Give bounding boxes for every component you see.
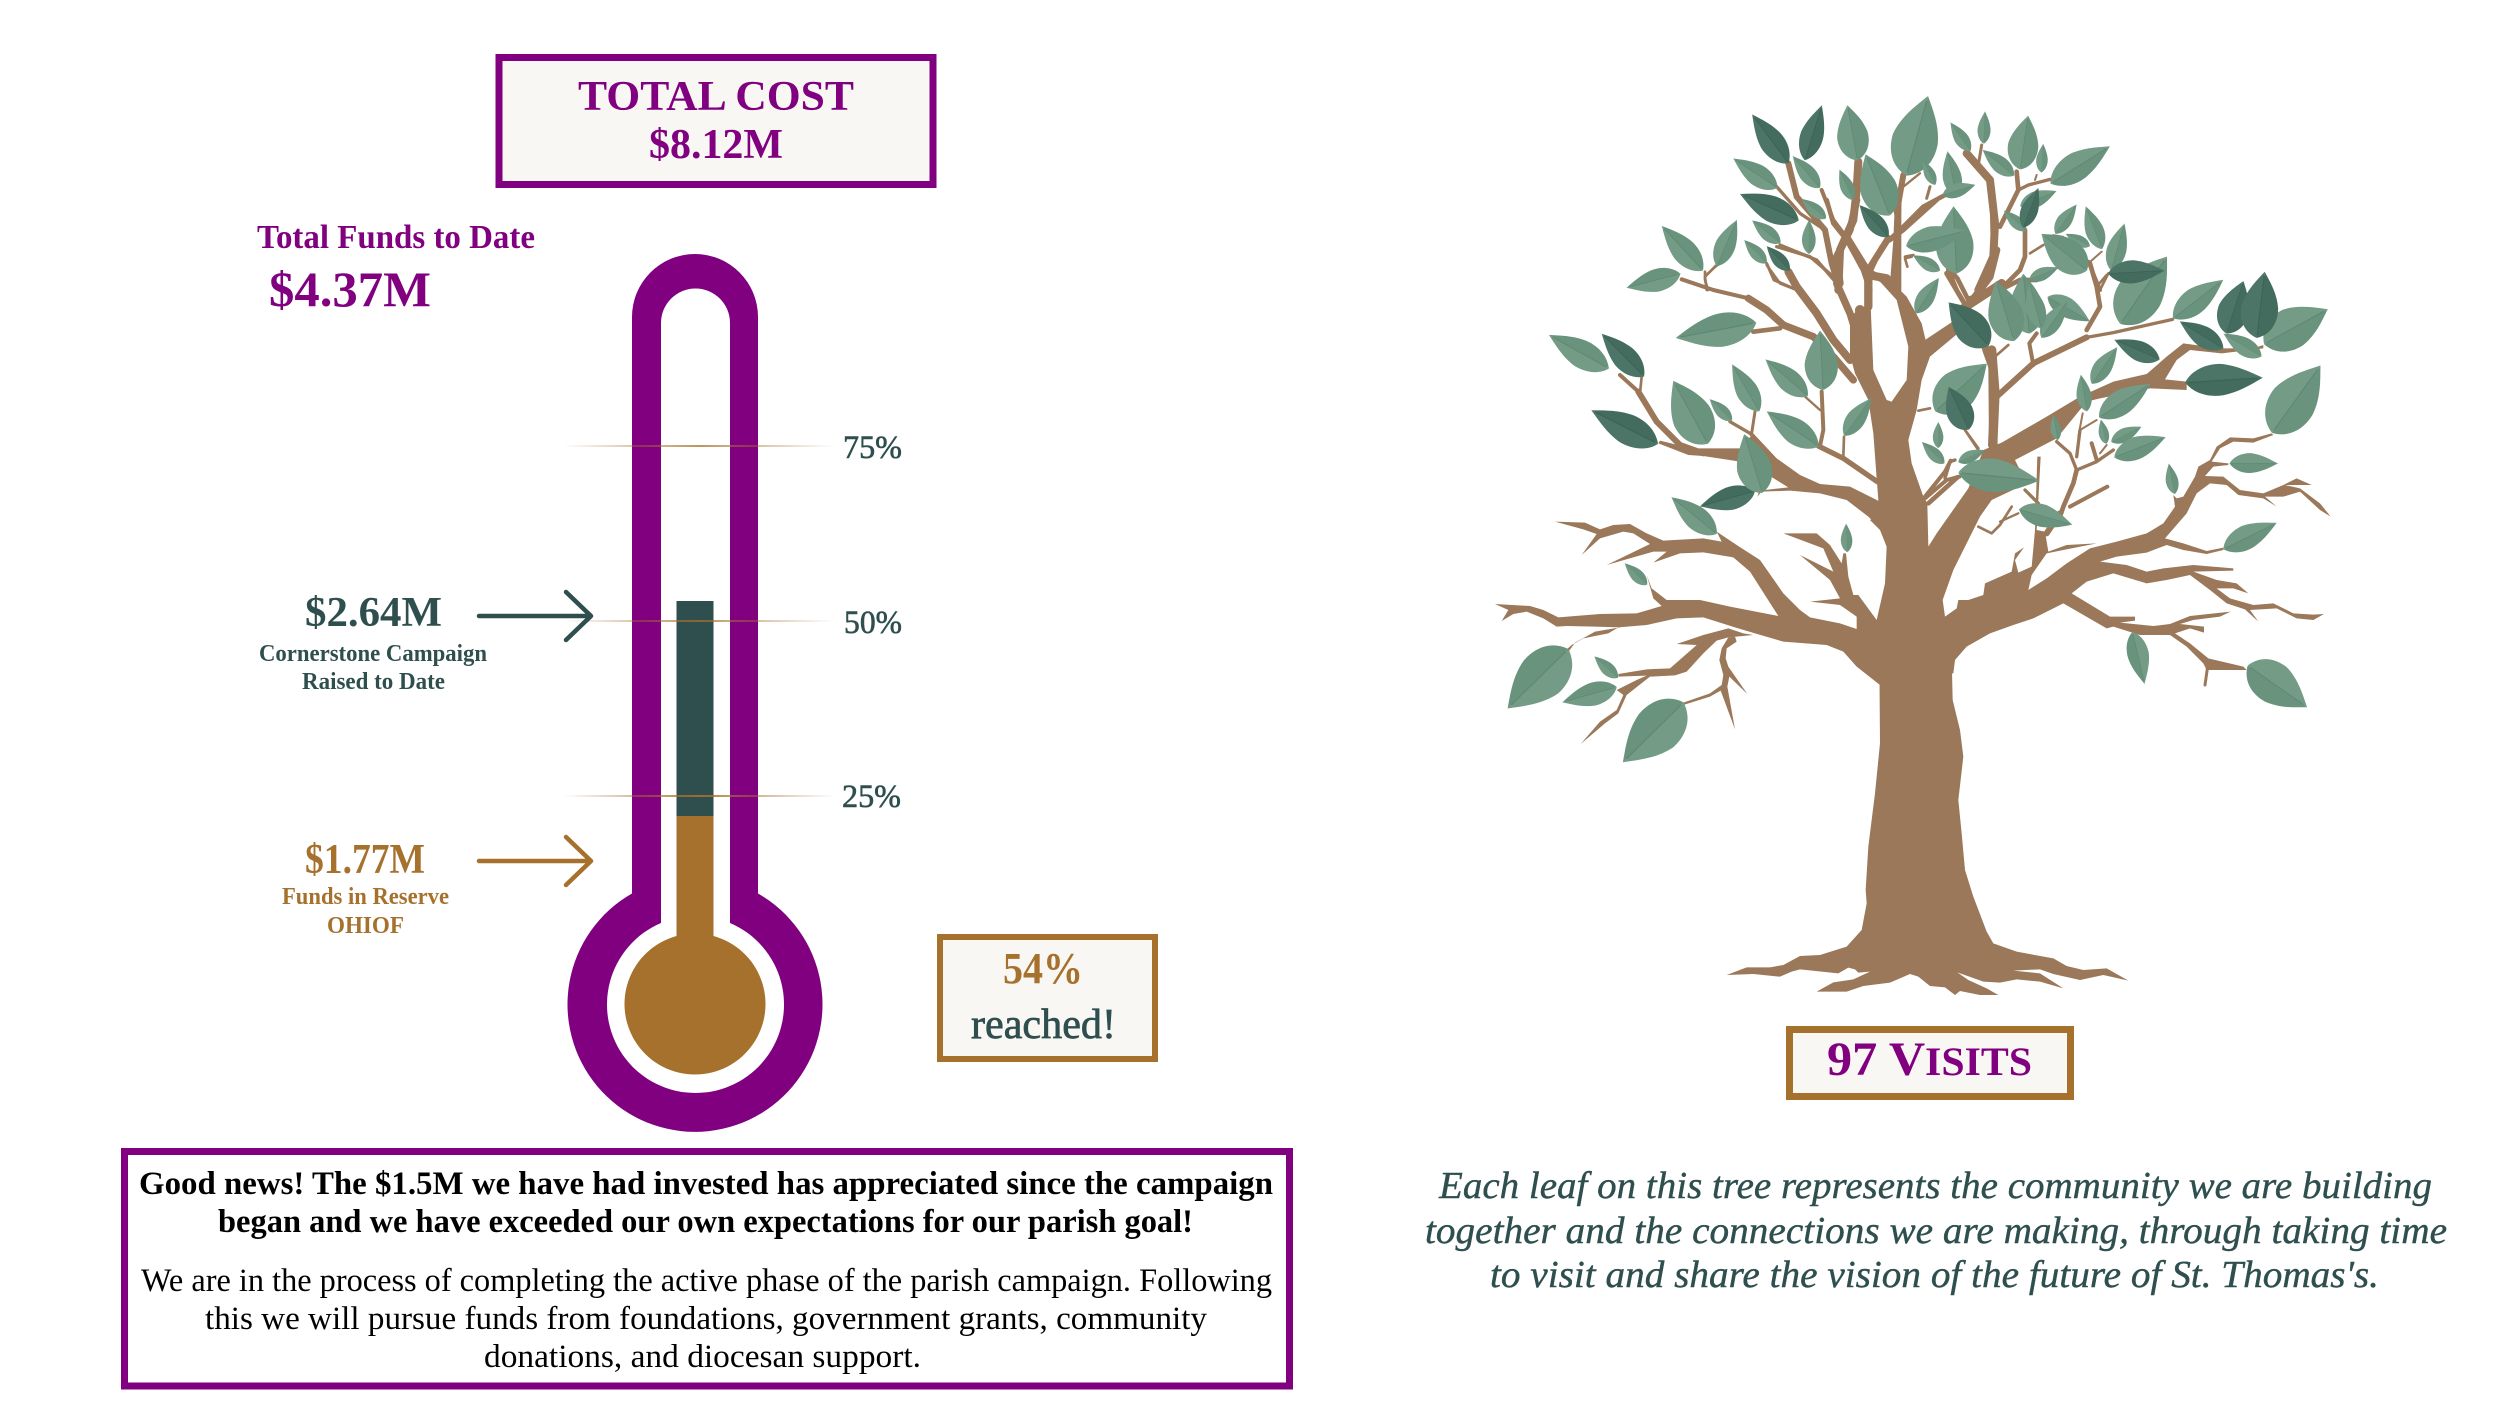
good news paragraph: began and we have exceeded our own expectations for our parish goal! [218, 1204, 1193, 1240]
arrow: reserve [479, 837, 591, 885]
label: 50 percent: 50% [844, 605, 902, 641]
caption: each leaf text: together and the connections we are making, through taking time [1425, 1210, 2447, 1252]
tick line 75 [563, 445, 835, 447]
thermometer outer shell [568, 254, 823, 1132]
tree trunk and roots [1727, 657, 2128, 995]
label: total funds to date: $4.37M [269, 261, 431, 317]
caption: each leaf text: Each leaf on this tree represents the community we are building [1438, 1165, 2432, 1207]
callout: campaign raised: Raised to Date [302, 669, 445, 695]
caption: each leaf text: to visit and share the vision of the future of St. Thomas's. [1490, 1254, 2379, 1296]
callout: campaign raised: $2.64M [305, 590, 442, 636]
callout: 54 percent reached: reached! [971, 1002, 1116, 1048]
callout: funds in reserve: OHIOF [327, 913, 404, 939]
panel: good news text box [124, 1152, 1290, 1386]
callout: funds in reserve [282, 837, 449, 939]
label: 25 percent: 25% [842, 779, 901, 815]
right limbs [1900, 250, 2331, 685]
callout: 54 percent reached: 54% [1003, 944, 1083, 993]
tick line 25 [563, 795, 835, 797]
callout: campaign raised: Cornerstone Campaign [259, 641, 487, 667]
label: 97 visits box [1790, 1030, 2070, 1096]
good news paragraph: Good news! The $1.5M we have had invested has appreciated since the campaign [139, 1166, 1273, 1202]
callout: funds in reserve: $1.77M [305, 837, 425, 883]
label: 75 percent: 75% [843, 430, 902, 466]
arrow: campaign [479, 592, 591, 640]
callout: funds in reserve: Funds in Reserve [282, 884, 449, 910]
callout: 54 percent reached [940, 937, 1155, 1059]
value: total cost amount: $8.12M [649, 122, 783, 168]
tree leaves [1492, 90, 2339, 780]
next steps paragraph [141, 1263, 1272, 1375]
chart: thermometer [563, 254, 835, 1132]
campaign fill: dark teal [676, 601, 714, 816]
reserve fill: gold [624, 816, 766, 1075]
label: total funds to date: Total Funds to Date [257, 219, 535, 256]
left lower limbs [1495, 500, 1923, 744]
crown top twigs [1705, 145, 2108, 290]
label: total funds to date [257, 219, 535, 317]
good news paragraph [139, 1166, 1273, 1240]
label: 97 visits box: 97 VISITS [1827, 1033, 2032, 1086]
tick line 50 [563, 620, 835, 622]
next steps paragraph: donations, and diocesan support. [484, 1339, 921, 1375]
illustration: tree [1492, 90, 2339, 995]
crown central column and left crown branches [1620, 200, 2002, 570]
heading: total cost: TOTAL COST [578, 74, 854, 120]
thermometer inner cavity [607, 288, 784, 1093]
next steps paragraph: this we will pursue funds from foundations, government grants, community [205, 1301, 1207, 1337]
caption: each leaf text [1425, 1165, 2447, 1296]
panel: total cost box [499, 58, 933, 184]
callout: campaign raised [259, 590, 487, 695]
next steps paragraph: We are in the process of completing the active phase of the parish campaign. Following [141, 1263, 1272, 1299]
